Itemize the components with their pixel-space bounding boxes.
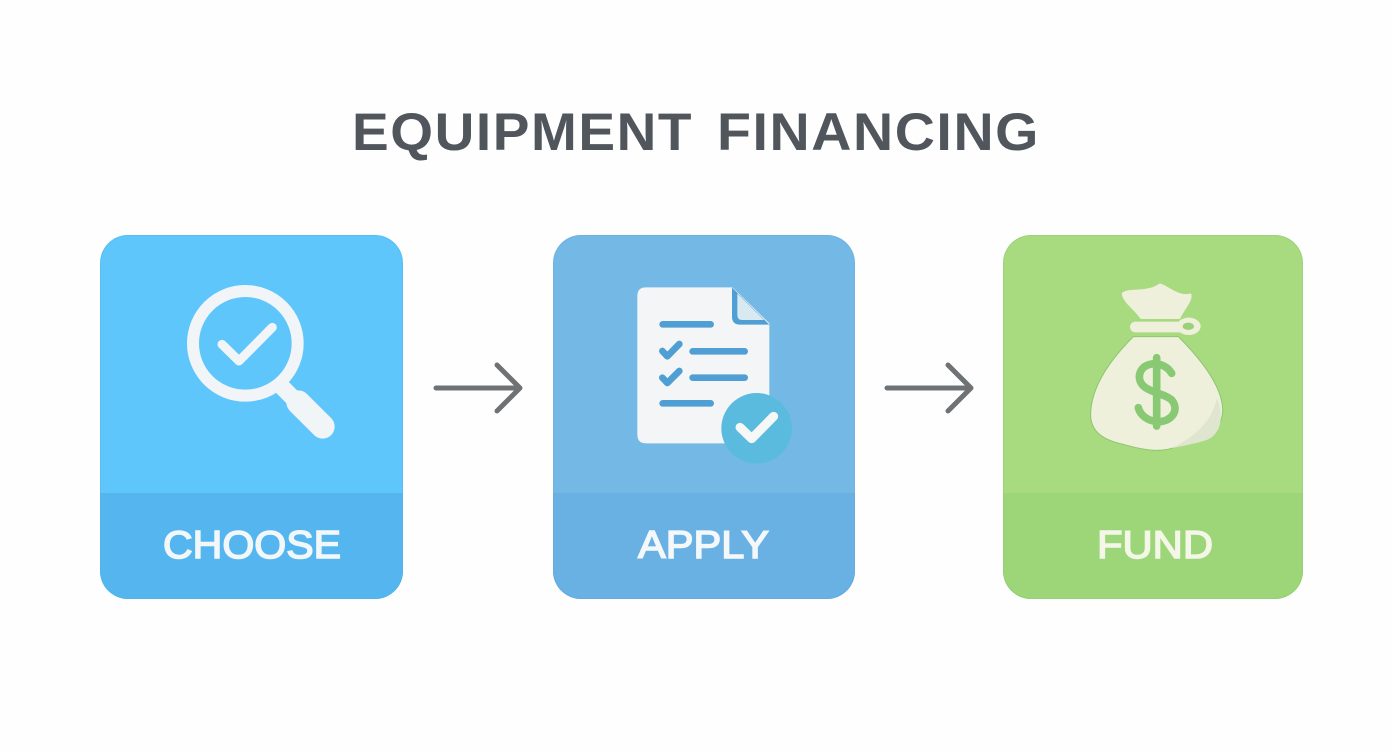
label: choose: CHOOSE <box>163 524 341 567</box>
arrow: apply to fund <box>887 365 971 411</box>
title <box>352 103 1040 162</box>
label: fund: FUND <box>1097 524 1213 567</box>
icon: magnifying glass with check <box>193 291 323 427</box>
arrow: choose to apply <box>436 365 520 411</box>
panel: choose <box>100 235 403 599</box>
panel: apply <box>553 235 855 599</box>
icon: money bag <box>1091 283 1223 450</box>
title: EQUIPMENT <box>352 103 693 162</box>
icon: document checklist with badge <box>637 287 792 464</box>
panel: fund <box>1003 235 1303 599</box>
title: FINANCING <box>717 103 1040 162</box>
label: apply: APPLY <box>638 524 769 567</box>
